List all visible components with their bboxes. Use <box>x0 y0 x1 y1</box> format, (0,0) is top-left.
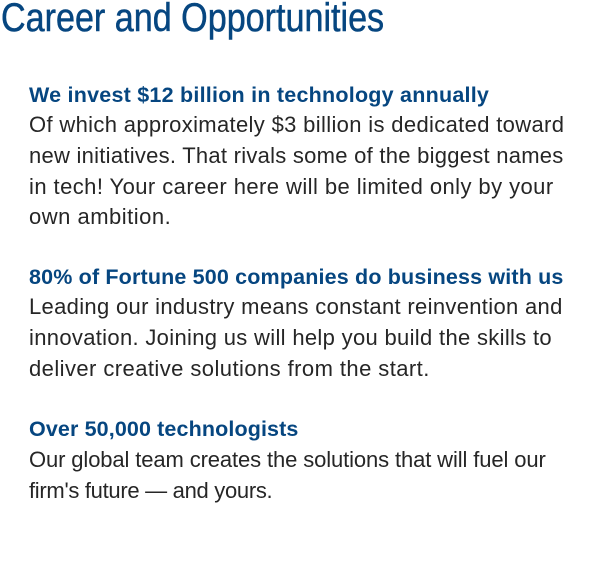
heading: technology investment: We invest $12 billion in technology annually <box>29 83 489 107</box>
heading: Fortune 500: 80% of Fortune 500 companies do business with us <box>29 265 564 289</box>
text block: technology investment <box>29 112 564 229</box>
text block: technology investment: new initiatives. That rivals some of the biggest names <box>29 143 564 168</box>
text block: Fortune 500: Leading our industry means constant reinvention and <box>29 294 563 319</box>
text block: technology investment: Of which approximately $3 billion is dedicated toward <box>29 112 564 137</box>
text block: technologists <box>29 447 546 503</box>
heading: technologists: Over 50,000 technologists <box>29 417 298 441</box>
text block: technology investment: in tech! Your career here will be limited only by your <box>29 174 554 198</box>
text block: technology investment: own ambition. <box>29 204 171 229</box>
text block: Fortune 500 <box>29 294 563 380</box>
text block: technologists: firm's future — and yours. <box>29 478 272 503</box>
text block: Fortune 500: deliver creative solutions from the start. <box>29 356 430 380</box>
text block: technologists: Our global team creates the solutions that will fuel our <box>29 447 546 472</box>
text block: Fortune 500: innovation. Joining us will help you build the skills to <box>29 325 552 350</box>
